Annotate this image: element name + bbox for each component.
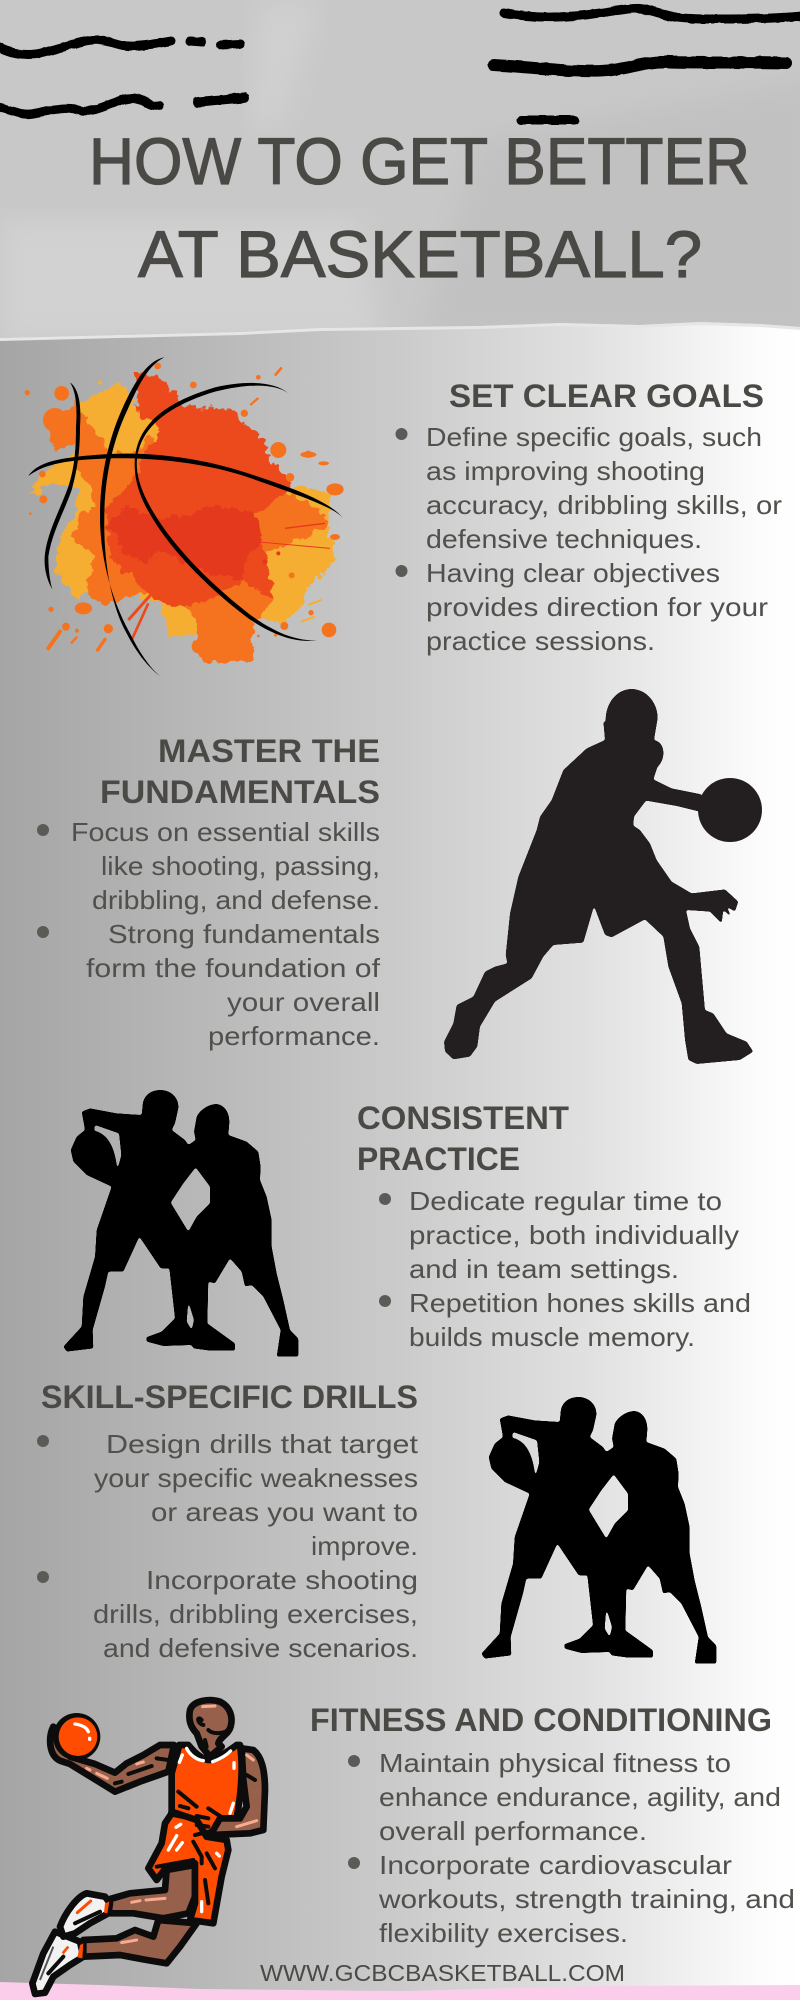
section: fitness and conditioning: overall performance. — [379, 1816, 647, 1846]
section: fitness and conditioning: Incorporate cardiovascular — [379, 1850, 732, 1880]
section: consistent practice: PRACTICE — [357, 1141, 520, 1177]
section: consistent practice: Repetition hones skills and — [409, 1288, 751, 1318]
jersey highlights — [168, 1748, 234, 1912]
section: fitness and conditioning: FITNESS AND CONDITIONING — [310, 1702, 772, 1738]
section: set clear goals: SET CLEAR GOALS — [449, 378, 764, 414]
section: skill-specific drills: Design drills that target — [106, 1429, 419, 1459]
icon: two players silhouette, second copy — [481, 1397, 716, 1664]
icon: two players silhouette — [63, 1090, 298, 1357]
raised arm — [50, 1727, 174, 1792]
title — [89, 124, 750, 291]
skin highlights — [87, 1706, 257, 1943]
socks and shoe details — [40, 1901, 109, 1980]
ball — [53, 1713, 100, 1760]
section: set clear goals: provides direction for your — [426, 592, 768, 622]
section: skill-specific drills: your specific weaknesses — [94, 1463, 418, 1493]
section: set clear goals: accuracy, dribbling skills, or — [426, 490, 782, 520]
section: set clear goals: Define specific goals, such — [426, 422, 762, 452]
website footer: WWW.GCBCBASKETBALL.COM — [260, 1960, 625, 1986]
section: skill-specific drills: drills, dribbling exercises, — [93, 1599, 418, 1629]
section: consistent practice — [357, 1100, 751, 1352]
icon: cartoon player dunking — [32, 1700, 265, 1994]
section: consistent practice: Dedicate regular time to — [409, 1186, 722, 1216]
section: fitness and conditioning — [310, 1702, 795, 1948]
lower shoe — [32, 1932, 83, 1994]
decorative brush strokes — [0, 8, 800, 120]
section: set clear goals — [396, 378, 782, 656]
muscle and fold lines — [115, 1718, 255, 1903]
pink bottom strip — [0, 1982, 800, 2000]
section: consistent practice: CONSISTENT — [357, 1100, 569, 1136]
section: master the fundamentals: MASTER THE — [158, 733, 380, 769]
section: skill-specific drills: and defensive scenarios. — [103, 1633, 418, 1663]
section: set clear goals: practice sessions. — [426, 626, 655, 656]
section: master the fundamentals: performance. — [208, 1021, 380, 1051]
section: consistent practice: practice, both individually — [409, 1220, 739, 1250]
section: master the fundamentals: like shooting, passing, — [101, 851, 380, 881]
upper thigh — [107, 1865, 195, 1918]
section: skill-specific drills — [37, 1379, 419, 1663]
header band: torn paper — [0, 0, 800, 341]
section: skill-specific drills: Incorporate shooting — [146, 1565, 418, 1595]
icon: basketball with paint splat — [25, 363, 344, 663]
upper shoe — [60, 1893, 110, 1937]
section: master the fundamentals: your overall — [227, 987, 380, 1017]
section: set clear goals: defensive techniques. — [426, 524, 702, 554]
section: fitness and conditioning: workouts, strength training, and — [378, 1884, 795, 1914]
section: master the fundamentals: form the foundation of — [86, 953, 381, 983]
section: master the fundamentals — [37, 733, 381, 1051]
section: fitness and conditioning: enhance endurance, agility, and — [379, 1782, 781, 1812]
icon: dribbling player silhouette — [444, 689, 762, 1064]
section: fitness and conditioning: flexibility exercises. — [379, 1918, 628, 1948]
basketball seam lines — [28, 357, 343, 677]
lower thigh — [83, 1920, 197, 1963]
section: consistent practice: builds muscle memory. — [409, 1322, 695, 1352]
section: skill-specific drills: improve. — [311, 1531, 418, 1561]
section: master the fundamentals: Focus on essential skills — [71, 817, 380, 847]
section: set clear goals: Having clear objectives — [426, 558, 720, 588]
section: master the fundamentals: dribbling, and defense. — [92, 885, 380, 915]
section: skill-specific drills: SKILL-SPECIFIC DRILLS — [41, 1379, 418, 1415]
second arm — [210, 1748, 265, 1835]
section: master the fundamentals: FUNDAMENTALS — [100, 774, 380, 810]
section: consistent practice: and in team settings. — [409, 1254, 679, 1284]
head — [189, 1700, 232, 1757]
section: fitness and conditioning: Maintain physical fitness to — [379, 1748, 731, 1778]
section: master the fundamentals: Strong fundamentals — [108, 919, 380, 949]
shorts — [148, 1813, 228, 1923]
section: skill-specific drills: or areas you want to — [151, 1497, 418, 1527]
section: set clear goals: as improving shooting — [426, 456, 705, 486]
title: HOW TO GET BETTER — [89, 124, 750, 198]
jersey — [172, 1745, 242, 1837]
title: AT BASKETBALL? — [138, 217, 702, 291]
